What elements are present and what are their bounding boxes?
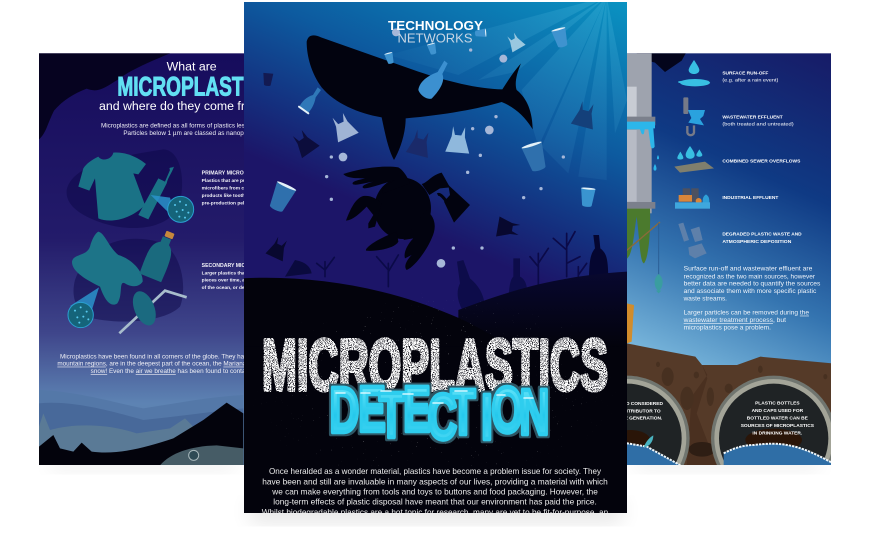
- icon: t-shirt: [78, 153, 146, 220]
- intro text: Particles below 1 µm are classed as nanoplastics.: [123, 130, 263, 137]
- text: secondary microplastics: Larger plastics that break into smaller: [202, 270, 289, 276]
- green slime: [627, 208, 650, 264]
- sea turtle silhouette: [343, 167, 470, 270]
- text: main sources paragraph: [683, 266, 820, 331]
- cups: [262, 27, 596, 215]
- label: combined sewer overflows: COMBINED SEWER OVERFLOWS: [722, 158, 801, 164]
- light rays: [388, 0, 627, 180]
- text: main sources paragraph: better data are needed to quantify the sources: [684, 281, 820, 288]
- text: secondary microplastics: [202, 263, 244, 290]
- icon: drinking straw and lid: [119, 288, 187, 333]
- left sewer pipe: WASTE GENERATION.: [611, 416, 663, 422]
- page shadows: [50, 455, 820, 522]
- right sewer pipe: BOTTLED WATER CAN BE: [747, 416, 809, 422]
- floating plastic debris: [262, 27, 599, 268]
- title: detection: [330, 374, 549, 453]
- logo: technology networks: NETWORKS: [398, 32, 472, 46]
- text: primary microplastics: products like toothpaste, or: [202, 193, 265, 199]
- icon: toothpaste tube: [138, 167, 174, 219]
- left sewer pipe: ALSO CONSIDERED: [616, 401, 664, 407]
- text: secondary microplastics: pieces over time, at the surface: [202, 278, 274, 284]
- microplastic dots: [325, 28, 565, 268]
- intro paragraph: long-term effects of plastic disposal have meant that our environment has paid the price.: [273, 497, 597, 507]
- cave silhouette top: [39, 53, 170, 139]
- heading line: what are: What are: [167, 60, 217, 74]
- icon: plastic bottle: [140, 230, 174, 282]
- label: wastewater effluent: WASTEWATER EFFLUENT: [722, 114, 783, 120]
- label: degraded plastic waste: DEGRADED PLASTIC WASTE AND: [722, 232, 802, 238]
- logo: technology networks: TECHNOLOGY: [388, 19, 484, 33]
- right hill: [458, 272, 627, 514]
- orange figure: [627, 303, 634, 343]
- icon: degraded plastic waste: [678, 223, 707, 258]
- text: secondary microplastics: of the ocean, or deep down.: [202, 285, 266, 291]
- icon: combined sewer overflows: [674, 146, 714, 173]
- text: primary microplastics: pre-production pellets.: [202, 200, 255, 206]
- label: industrial effluent: INDUSTRIAL EFFLUENT: [722, 195, 778, 201]
- logo: technology networks: [388, 19, 484, 46]
- left sewer pipe: A CONTRIBUTOR TO: [612, 408, 661, 414]
- intro text: [102, 123, 244, 136]
- bags: [265, 31, 599, 261]
- bottles: [299, 61, 448, 113]
- text: primary microplastics: PRIMARY MICROPLASTICS: [202, 170, 270, 176]
- icon: plastic bag: [72, 232, 143, 305]
- intro paragraph: Once heralded as a wonder material, plastics have become a problem issue for society. They: [269, 466, 602, 476]
- word: detection: DETECTION: [330, 374, 549, 453]
- text: found in all corners: Microplastics have been found in all corners of the globe. They have been found in: [60, 353, 291, 360]
- right sewer pipe: PLASTIC BOTTLES: [755, 401, 800, 407]
- text: main sources paragraph: recognized as the two main sources, however: [684, 273, 815, 280]
- left hill: [243, 278, 627, 514]
- text: main sources paragraph: waste streams.: [683, 295, 727, 302]
- right sewer pipe: [711, 376, 836, 501]
- drainage pipe: [623, 53, 659, 213]
- icon: surface run-off: [678, 60, 710, 86]
- text: primary microplastics: Plastics that are purposefully made, like: [202, 178, 294, 184]
- label: surface run-off: SURFACE RUN-OFF: [722, 70, 768, 76]
- intro paragraph: [262, 466, 609, 517]
- intro paragraph: have been and still are invaluable in many aspects of our lives, providing a material with which: [262, 476, 608, 486]
- label: atmospheric deposition: ATMOSPHERIC DEPOSITION: [722, 239, 792, 245]
- icon: industrial effluent: [675, 188, 710, 209]
- fishing rod and fish: [623, 222, 663, 293]
- text: found in all corners: [57, 354, 244, 375]
- bottles half sunk: [457, 260, 485, 317]
- text: found in all corners: snow! Even the air we breathe has been found to contain them.: [91, 368, 268, 375]
- text: secondary microplastics: SECONDARY MICROPLASTICS: [202, 263, 279, 269]
- source labels: [722, 70, 802, 245]
- heading word: microplastics: MICROPLASTICS: [117, 71, 275, 101]
- background blobs: [67, 149, 183, 322]
- left sewer pipe: [564, 376, 690, 501]
- text: main sources paragraph: Surface run-off and wastewater effluent are: [684, 266, 813, 273]
- panel: centre cover page: [243, 0, 627, 517]
- title: microplastics: MICROPLASTICS: [262, 326, 608, 406]
- text: main sources paragraph: and associate them with more specific plastic: [684, 288, 816, 295]
- text: found in all corners: mountain regions, are in the deepest part of the ocean, the Mariana Trench: [57, 361, 268, 368]
- text: primary microplastics: microfibers from clothing and: [202, 185, 270, 191]
- icon: wastewater effluent: [683, 97, 705, 135]
- heading line: where do they come from: and where do they come from?: [99, 99, 269, 113]
- panel: right page, sources of microplastics: [627, 53, 831, 465]
- intro text: Microplastics are defined as all forms of plastics less than 5 mm in diameter.: [101, 123, 314, 130]
- plastic particle star field: [250, 290, 620, 490]
- glossy highlights: [336, 391, 533, 403]
- text: main sources paragraph: wastewater treatment process , but: [683, 317, 786, 324]
- seabed silhouettes: corals and bottles: [317, 232, 587, 287]
- text: primary microplastics: [202, 170, 244, 206]
- label: rain event: (e.g. after a rain event): [722, 78, 779, 84]
- intro paragraph: we can make everything from tools and toys to buttons and food packaging. However, the: [271, 486, 598, 496]
- right sewer pipe: AND CAPS USED FOR: [752, 408, 804, 414]
- panel: left page, what are microplastics: [39, 53, 244, 465]
- text: main sources paragraph: Larger particles can be removed during the: [684, 310, 809, 317]
- right sewer pipe: SOURCES OF MICROPLASTICS: [741, 423, 815, 429]
- icon: magnified particles, secondary: [68, 287, 99, 328]
- ground with rock texture: [623, 343, 832, 465]
- heading: [100, 62, 244, 112]
- whale silhouette: [307, 35, 533, 160]
- text: main sources paragraph: microplastics pose a problem.: [684, 324, 771, 331]
- intro paragraph: Whilst biodegradable plastics are a hot topic for research, many are yet to be fit-for-purpose, an: [262, 507, 609, 517]
- mountain landscape: [39, 398, 244, 465]
- right sewer pipe: IN DRINKING WATER.: [752, 431, 803, 437]
- cave silhouette top: [637, 53, 686, 72]
- label: treated and untreated: (both treated and untreated): [722, 122, 794, 128]
- icon: magnified particles, primary: [151, 195, 194, 222]
